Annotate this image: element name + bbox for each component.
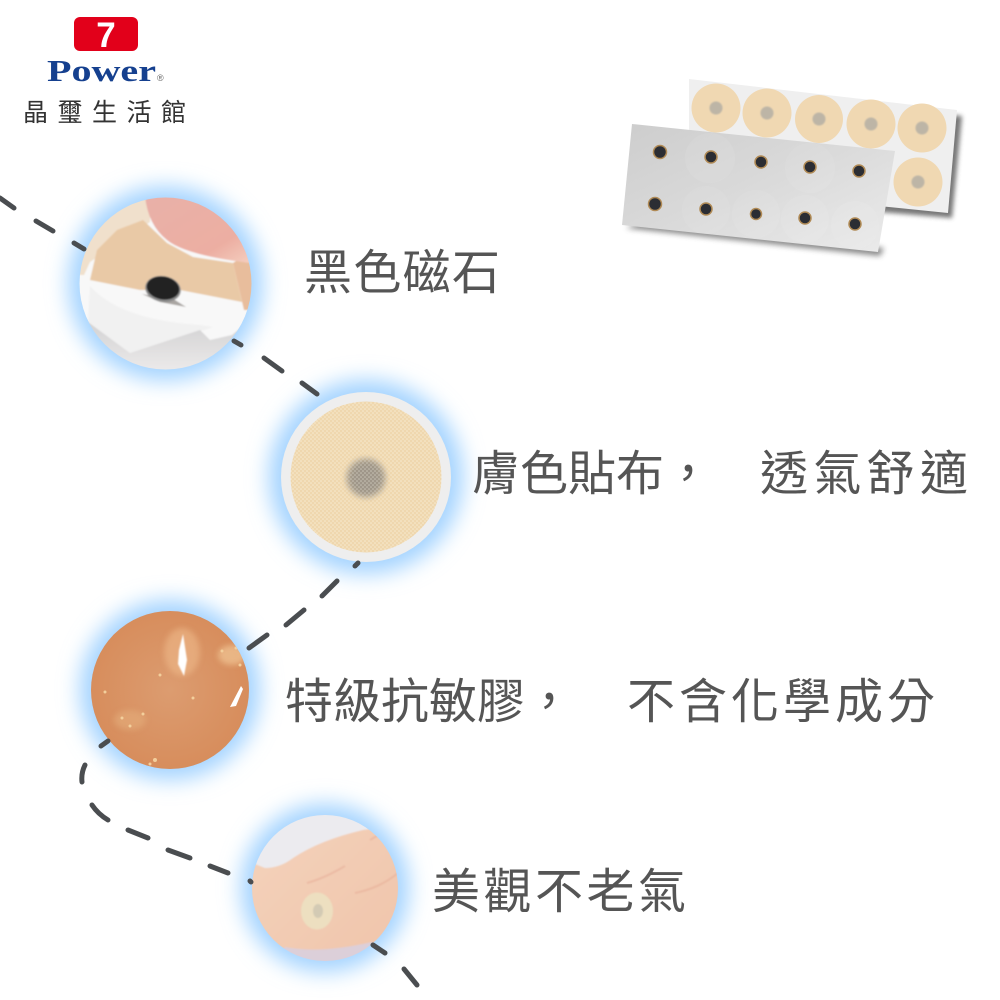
glow	[80, 600, 260, 780]
front sheet shadow	[626, 222, 884, 256]
photo: patch on hand	[250, 813, 400, 963]
logo red badge	[74, 16, 138, 55]
glow	[269, 380, 463, 574]
photo: patch close-up	[280, 391, 452, 563]
label: 黑色磁石	[304, 247, 500, 300]
photo: finger peeling patch with magnet	[78, 196, 256, 372]
label: 特級抗敏膠，	[285, 676, 573, 729]
logo registered mark: ®	[157, 73, 164, 83]
feature 3: hypoallergenic adhesive	[80, 600, 935, 780]
logo: 7 Power 晶璽生活館	[23, 16, 196, 127]
glow	[68, 186, 262, 380]
front sheet with black magnets	[622, 124, 895, 252]
feature 4: discreet on skin	[241, 804, 686, 972]
dashed path connecting the circles	[0, 198, 417, 985]
feature 2: skin-tone patch	[269, 380, 968, 574]
label continued: 不含化學成分	[627, 676, 935, 729]
label: 美觀不老氣	[432, 866, 686, 919]
photo: adhesive on skin	[90, 610, 250, 770]
back sheet with beige patches	[689, 79, 957, 213]
label: 膚色貼布，	[472, 448, 712, 501]
logo red badge: 7	[96, 16, 116, 55]
glow	[241, 804, 409, 972]
label continued: 透氣舒適	[760, 448, 968, 501]
logo store name: 晶璽生活館	[23, 99, 196, 127]
logo wordmark: Power	[47, 53, 156, 88]
product photo: patch sheets	[622, 79, 962, 256]
back sheet shadow	[700, 90, 962, 218]
feature 1: black magnet	[68, 186, 500, 380]
